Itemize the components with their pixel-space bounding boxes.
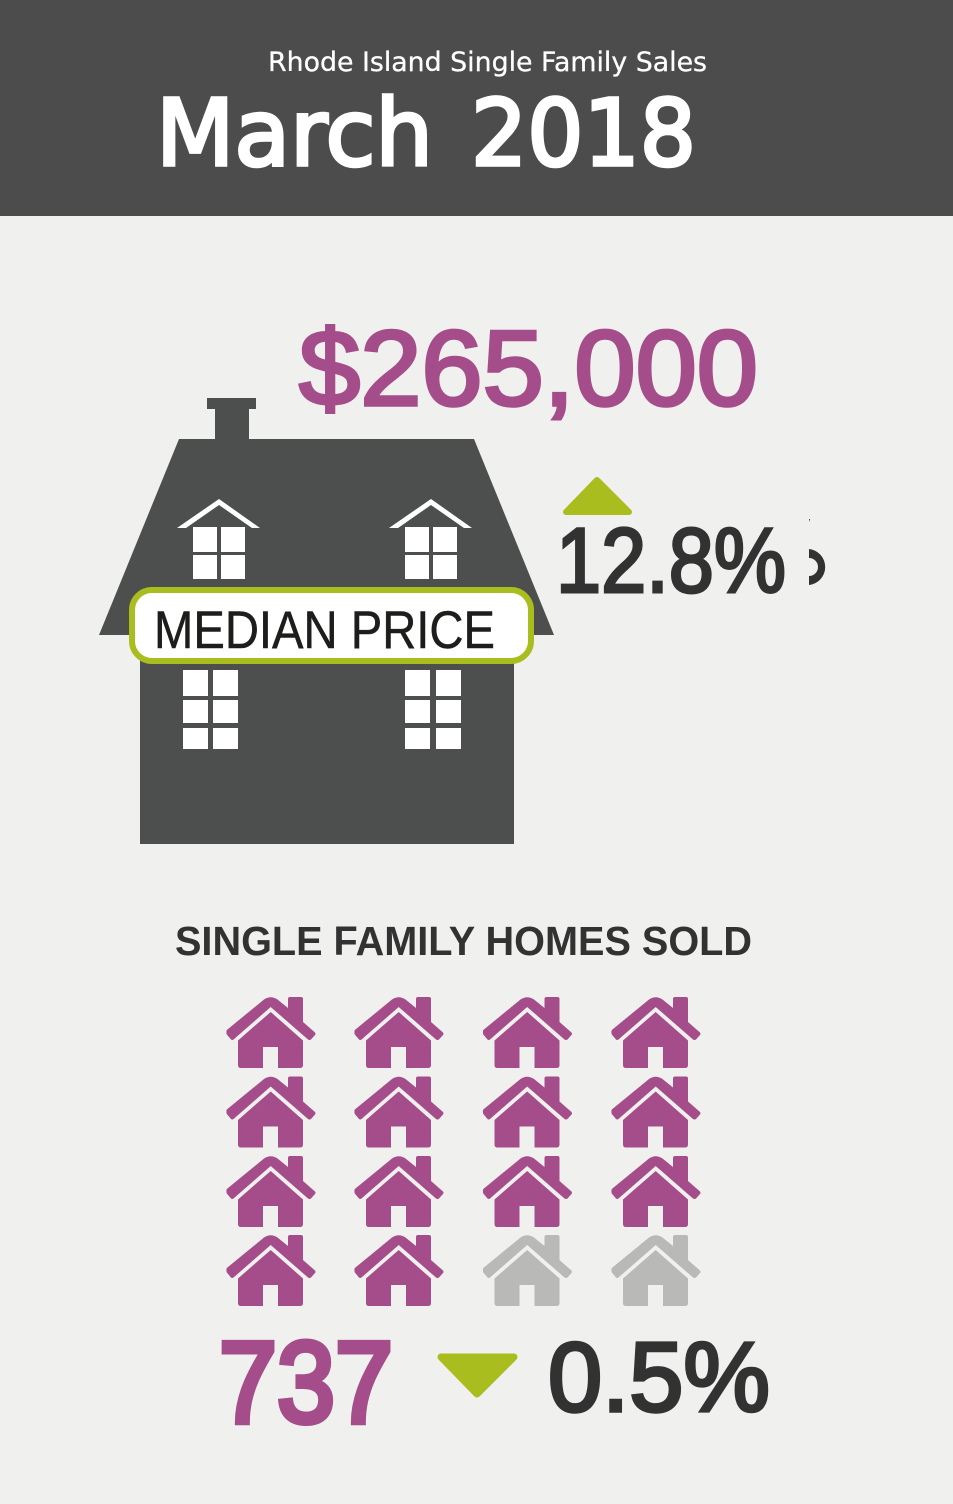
title [156,80,696,187]
header band [0,0,953,216]
right dormer [389,499,472,579]
subtitle: Rhode Island Single Family Sales [268,47,707,78]
chimney [207,398,256,440]
roof [99,439,554,635]
label text: MEDIAN PRICE [154,601,495,660]
house body [140,630,514,844]
left dormer [177,499,260,579]
title: 2018 [471,80,696,187]
clipped glyph remnant [809,519,825,585]
homes sold heading: SINGLE FAMILY HOMES SOLD [175,918,752,964]
house illustration [99,398,554,844]
right lower window [405,670,461,749]
up arrow [566,480,629,512]
homes sold change percent: 0.5% [548,1322,770,1432]
median price value: $265,000 [299,308,758,428]
title: March [156,80,433,187]
grey house icons [483,1235,700,1306]
purple house icons [226,997,700,1306]
down arrow [441,1357,514,1394]
house icon grid [226,997,700,1306]
price change percent: 12.8% [556,510,786,612]
left lower window [183,670,238,749]
median price label [132,590,531,661]
homes sold value: 737 [219,1319,393,1447]
